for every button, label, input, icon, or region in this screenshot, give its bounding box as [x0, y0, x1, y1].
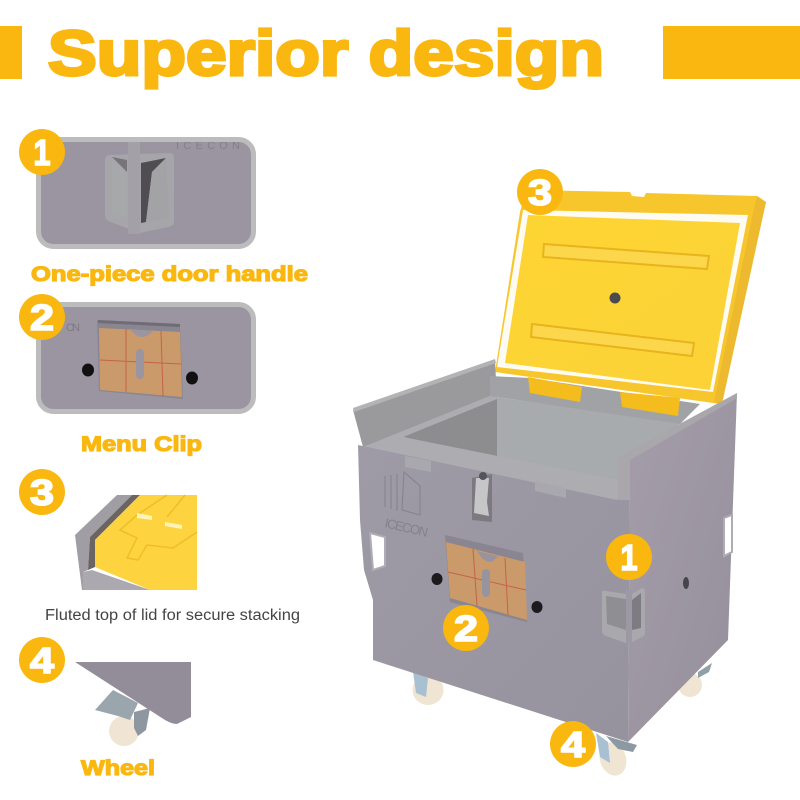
badge 3 on lid: 3 — [528, 172, 552, 213]
badge 3 on lid — [517, 169, 563, 215]
badge 4 on wheel — [550, 721, 596, 767]
rim — [363, 393, 618, 502]
badge 1 left: 1 — [34, 132, 50, 173]
right title bar — [663, 26, 800, 79]
front face — [358, 445, 630, 742]
badge 3 left: 3 — [30, 472, 54, 513]
panel: lid corner detail — [75, 495, 197, 590]
left hand hold — [370, 533, 385, 570]
badge 2 left — [19, 294, 65, 340]
panel: menu clip detail — [38, 304, 254, 412]
panel: wheel detail — [75, 662, 191, 746]
interior — [403, 397, 680, 482]
right hand hold — [724, 515, 732, 556]
title: Superior design — [48, 19, 604, 89]
badge 1 on handle: 1 — [620, 537, 638, 578]
badge 4 left — [19, 637, 65, 683]
panel: door handle detail: ICECON — [176, 140, 240, 152]
corner door handle — [602, 588, 645, 644]
badge 2 on menu clip — [443, 605, 489, 651]
badge 1 left — [19, 129, 65, 175]
open lid — [495, 190, 766, 404]
rim tabs — [405, 456, 566, 498]
logo mark: ICECON — [383, 515, 430, 540]
front holes — [432, 573, 542, 613]
badge 1 on handle — [606, 534, 652, 580]
illustration: insulated container — [353, 190, 766, 779]
side hole — [683, 577, 689, 589]
label: wheel: Wheel — [81, 757, 155, 780]
caption: fluted lid: Fluted top of lid for secure stacking — [45, 607, 300, 624]
panel: door handle detail — [38, 140, 254, 246]
latch — [472, 472, 492, 522]
badge 2 left: 2 — [30, 297, 54, 338]
logo mark — [383, 472, 430, 540]
right wall edge — [618, 393, 737, 500]
badge 3 left — [19, 469, 65, 515]
panel: menu clip detail: ON — [66, 322, 80, 334]
label: door handle: One-piece door handle — [31, 263, 308, 286]
badge 2 on menu clip: 2 — [454, 608, 478, 649]
badge 4 on wheel: 4 — [561, 724, 585, 765]
wheel back right — [678, 663, 712, 697]
right side face — [628, 393, 737, 742]
menu clip — [445, 535, 527, 622]
wheel front left — [412, 672, 444, 705]
back ledge and hinges — [490, 376, 700, 424]
wheel front right — [595, 733, 637, 779]
label: menu clip: Menu Clip — [81, 433, 202, 456]
left wall — [353, 360, 497, 447]
badge 4 left: 4 — [30, 640, 54, 681]
left title bar — [0, 26, 22, 79]
